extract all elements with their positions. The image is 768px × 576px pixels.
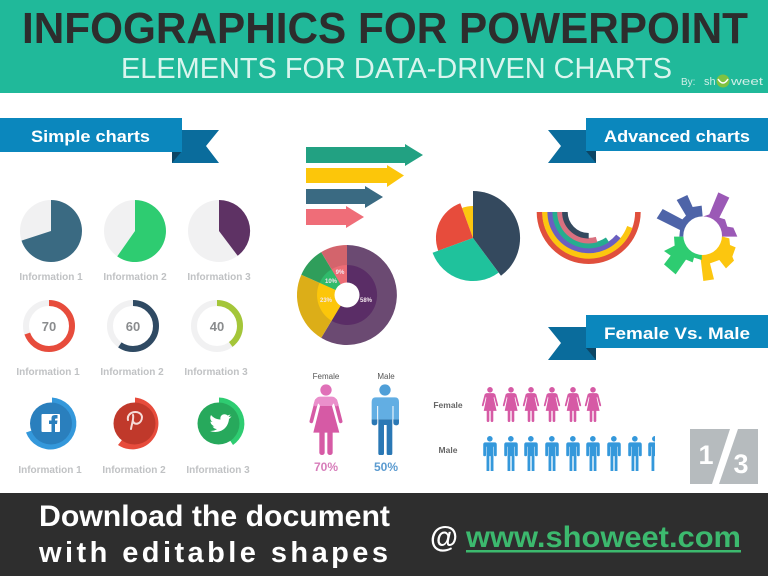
female figure bbox=[311, 372, 341, 474]
donut chart: 23% bbox=[320, 298, 333, 304]
ribbon: female vs male bbox=[548, 315, 768, 360]
pictogram row labels: Female bbox=[433, 400, 463, 410]
male figure: 50% bbox=[374, 460, 398, 474]
ribbon: advanced charts bbox=[548, 118, 768, 163]
download text: Download the document bbox=[39, 500, 390, 533]
social labels: Information 1 bbox=[18, 465, 82, 476]
arrow: teal bbox=[306, 144, 423, 166]
showeet logo: By: bbox=[681, 77, 695, 88]
social labels: Information 3 bbox=[186, 465, 250, 476]
ribbon: female vs male: Female Vs. Male bbox=[604, 324, 750, 343]
ring chart 40: 40 bbox=[210, 319, 224, 334]
icon: pinterest bbox=[114, 398, 158, 449]
pictogram row: female bbox=[483, 387, 600, 422]
title: INFOGRAPHICS FOR POWERPOINT bbox=[22, 4, 748, 53]
social labels bbox=[18, 465, 250, 476]
download text: with editable shapes bbox=[38, 537, 388, 569]
donut chart: 58% bbox=[360, 298, 373, 304]
ring labels: Information 3 bbox=[184, 367, 248, 378]
pie chart 1 bbox=[20, 200, 82, 262]
pie chart 3 bbox=[188, 200, 250, 262]
pie labels: Information 1 bbox=[19, 272, 83, 283]
ring chart 70: 70 bbox=[42, 319, 56, 334]
ring labels bbox=[16, 367, 248, 378]
male figure: Male bbox=[377, 372, 395, 381]
arrow: pink bbox=[306, 206, 364, 228]
showeet logo bbox=[681, 74, 763, 88]
ring labels: Information 2 bbox=[100, 367, 164, 378]
rainbow arc chart bbox=[540, 212, 638, 261]
exploded pie chart bbox=[433, 191, 520, 281]
footer band bbox=[0, 493, 768, 576]
pie labels: Information 3 bbox=[187, 272, 251, 283]
radial bar chart bbox=[657, 192, 737, 281]
icon: twitter bbox=[198, 398, 244, 445]
page number badge bbox=[690, 429, 758, 484]
showeet logo: sh bbox=[704, 76, 716, 88]
website link: www.showeet.com bbox=[465, 521, 741, 554]
icon: facebook bbox=[26, 398, 76, 449]
donut chart bbox=[297, 245, 397, 345]
pie labels: Information 2 bbox=[103, 272, 167, 283]
pictogram row labels: Male bbox=[439, 445, 458, 455]
male figure bbox=[372, 372, 399, 474]
download text bbox=[38, 500, 390, 569]
arrow: yellow bbox=[306, 165, 404, 187]
page number badge: 1 bbox=[698, 440, 714, 470]
pie chart 2 bbox=[104, 200, 166, 262]
social labels: Information 2 bbox=[102, 465, 166, 476]
header band bbox=[0, 0, 768, 93]
page number badge: 3 bbox=[733, 449, 749, 479]
ring chart 60: 60 bbox=[126, 319, 140, 334]
pictogram row labels bbox=[433, 400, 463, 455]
subtitle: ELEMENTS FOR DATA-DRIVEN CHARTS bbox=[121, 53, 672, 85]
ring labels: Information 1 bbox=[16, 367, 80, 378]
pie labels bbox=[19, 272, 251, 283]
donut chart: 10% bbox=[325, 279, 338, 285]
website link: @ bbox=[430, 521, 458, 554]
donut chart: 9% bbox=[336, 270, 345, 276]
ring chart 40 bbox=[194, 303, 240, 349]
ribbon: simple charts: Simple charts bbox=[31, 127, 150, 146]
arrow: slate bbox=[306, 186, 383, 208]
pictogram row: male bbox=[483, 436, 662, 471]
ring chart 70 bbox=[26, 303, 72, 349]
female figure: 70% bbox=[314, 460, 338, 474]
ribbon: simple charts bbox=[0, 118, 219, 163]
female figure: Female bbox=[313, 372, 340, 381]
ring chart 60 bbox=[110, 303, 156, 349]
ribbon: advanced charts: Advanced charts bbox=[604, 127, 750, 146]
showeet logo: weet bbox=[730, 76, 763, 88]
